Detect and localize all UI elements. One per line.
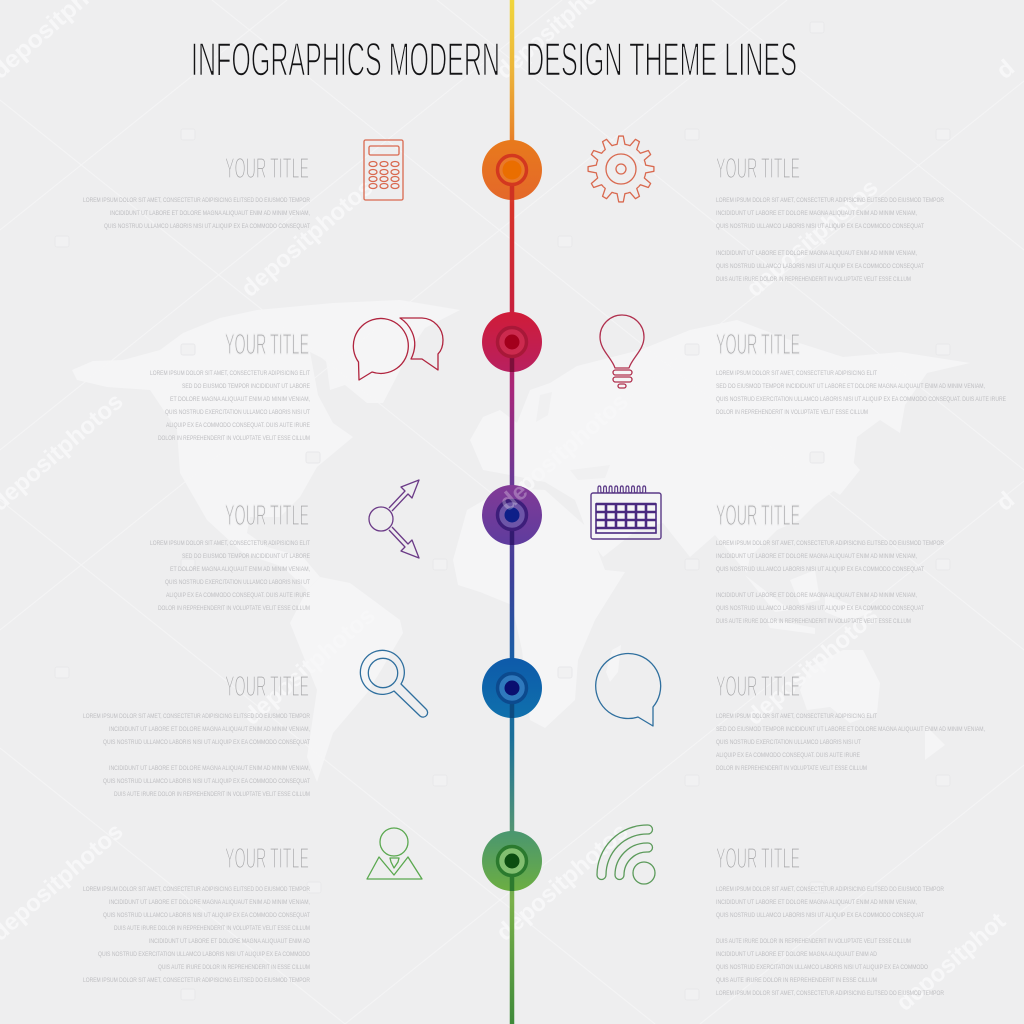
icon: calculator bbox=[364, 140, 403, 200]
body text bbox=[83, 886, 310, 984]
body text: INCIDIDUNT UT LABORE ET DOLORE MAGNA ALIQUAUT ENIM AD MINIM VENIAM, bbox=[110, 210, 310, 217]
panel: right block 4 bbox=[716, 671, 985, 772]
body text bbox=[150, 540, 310, 612]
body text: LOREM IPSUM DOLOR SIT AMET, CONSECTETUR ADIPISICING ELITSED DO EIUSMOD TEMPOR bbox=[716, 197, 944, 204]
body text: ALIQUIP EX EA COMMODO CONSEQUAT. DUIS AUTE IRURE bbox=[166, 422, 310, 429]
body text: DUIS AUTE IRURE DOLOR IN REPREHENDERIT IN VOLUPTATE VELIT ESSE CILLUM bbox=[114, 791, 310, 798]
body text bbox=[716, 886, 944, 997]
node 3 purple bbox=[482, 478, 542, 545]
body text: DOLOR IN REPREHENDERIT IN VOLUPTATE VELIT ESSE CILLUM bbox=[158, 605, 310, 612]
icon: calendar bbox=[591, 486, 661, 539]
panel: right block 3 bbox=[716, 500, 944, 625]
body text: QUIS NOSTRUD ULLAMCO LABORIS NISI UT ALIQUIP EX EA COMMODO CONSEQUAT bbox=[716, 605, 924, 612]
panel: right block 1: YOUR TITLE bbox=[716, 153, 800, 185]
map inland details bbox=[536, 392, 610, 480]
title: INFOGRAPHICS MODERN bbox=[191, 32, 500, 86]
panel: right block 2: YOUR TITLE bbox=[716, 329, 800, 361]
world map bbox=[72, 300, 970, 782]
icon: light bulb bbox=[600, 315, 644, 388]
title: DESIGN THEME LINES bbox=[526, 32, 797, 86]
body text: QUIS NOSTRUD ULLAMCO LABORIS NISI UT ALIQUIP EX EA COMMODO CONSEQUAT bbox=[103, 912, 310, 919]
body text: INCIDIDUNT UT LABORE ET DOLORE MAGNA ALIQUAUT ENIM AD bbox=[149, 938, 310, 945]
body text: DOLOR IN REPREHENDERIT IN VOLUPTATE VELIT ESSE CILLUM bbox=[716, 765, 867, 772]
watermark text: depositphotos bbox=[741, 174, 883, 303]
panel: right block 5 bbox=[716, 843, 944, 997]
icon: rss signal bbox=[597, 825, 655, 884]
icon: person bbox=[367, 828, 422, 879]
icon: speech bubble bbox=[596, 654, 661, 726]
node 1 orange bbox=[482, 140, 542, 200]
body text: QUIS NOSTRUD ULLAMCO LABORIS NISI UT ALIQUIP EX EA COMMODO CONSEQUAT bbox=[103, 778, 310, 785]
panel: left block 4 bbox=[83, 671, 310, 798]
body text bbox=[150, 370, 310, 442]
node 3 purple: de bbox=[494, 478, 533, 517]
body text: INCIDIDUNT UT LABORE ET DOLORE MAGNA ALIQUAUT ENIM AD MINIM VENIAM, bbox=[716, 210, 917, 217]
body text: LOREM IPSUM DOLOR SIT AMET, CONSECTETUR ADIPISICING ELIT bbox=[716, 713, 877, 720]
body text: INCIDIDUNT UT LABORE ET DOLORE MAGNA ALIQUAUT ENIM AD bbox=[716, 951, 877, 958]
body text: ALIQUIP EX EA COMMODO CONSEQUAT. DUIS AUTE IRURE bbox=[716, 752, 860, 759]
watermark text: depositphotos bbox=[238, 602, 380, 731]
watermark text: depositphotos bbox=[491, 818, 633, 947]
body text: DOLOR IN REPREHENDERIT IN VOLUPTATE VELIT ESSE CILLUM bbox=[716, 409, 868, 416]
body text: DUIS AUTE IRURE DOLOR IN REPREHENDERIT IN VOLUPTATE VELIT ESSE CILLUM bbox=[716, 618, 911, 625]
body text: QUIS AUTE IRURE DOLOR IN REPREHENDERIT IN ESSE CILLUM bbox=[158, 964, 310, 971]
body text: ET DOLORE MAGNA ALIQUAUT ENIM AD MINIM VENIAM, bbox=[170, 396, 310, 403]
body text: LOREM IPSUM DOLOR SIT AMET, CONSECTETUR ADIPISICING ELITSED DO EIUSMOD TEMPOR bbox=[716, 886, 944, 893]
panel: left block 3: YOUR TITLE bbox=[225, 500, 309, 532]
panel: right block 1 bbox=[716, 153, 944, 283]
body text: QUIS NOSTRUD EXERCITATION ULLAMCO LABORIS NISI UT bbox=[716, 739, 861, 746]
panel: left block 2: YOUR TITLE bbox=[225, 329, 309, 361]
body text: INCIDIDUNT UT LABORE ET DOLORE MAGNA ALIQUAUT ENIM AD MINIM VENIAM, bbox=[716, 250, 917, 257]
body text: LOREM IPSUM DOLOR SIT AMET, CONSECTETUR ADIPISICING ELITSED DO EIUSMOD TEMPOR bbox=[83, 886, 310, 893]
panel: left block 5: YOUR TITLE bbox=[225, 843, 309, 875]
body text: INCIDIDUNT UT LABORE ET DOLORE MAGNA ALIQUAUT ENIM AD MINIM VENIAM, bbox=[716, 899, 917, 906]
body text: LOREM IPSUM DOLOR SIT AMET, CONSECTETUR ADIPISICING ELITSED DO EIUSMOD TEMPOR bbox=[83, 197, 310, 204]
watermark text: depositphotos bbox=[741, 602, 883, 731]
node 2 red bbox=[482, 312, 542, 372]
body text: LOREM IPSUM DOLOR SIT AMET, CONSECTETUR ADIPISICING ELITSED DO EIUSMOD TEMPOR bbox=[83, 977, 310, 984]
body text: LOREM IPSUM DOLOR SIT AMET, CONSECTETUR ADIPISICING ELITSED DO EIUSMOD TEMPOR bbox=[716, 990, 944, 997]
body text: INCIDIDUNT UT LABORE ET DOLORE MAGNA ALIQUAUT ENIM AD MINIM VENIAM, bbox=[109, 726, 310, 733]
watermark text: depositphotos bbox=[236, 174, 378, 303]
body text: QUIS NOSTRUD EXERCITATION ULLAMCO LABORIS NISI UT ALIQUIP EX EA COMMODO bbox=[716, 964, 928, 971]
body text: LOREM IPSUM DOLOR SIT AMET, CONSECTETUR ADIPISICING ELITSED DO EIUSMOD TEMPOR bbox=[83, 713, 310, 720]
panel: right block 4: YOUR TITLE bbox=[716, 671, 800, 703]
icon: share arrows bbox=[369, 480, 419, 558]
body text bbox=[716, 370, 1006, 416]
body text: ET DOLORE MAGNA ALIQUAUT ENIM AD MINIM VENIAM, bbox=[170, 566, 310, 573]
body text: INCIDIDUNT UT LABORE ET DOLORE MAGNA ALIQUAUT ENIM AD MINIM VENIAM, bbox=[109, 899, 310, 906]
watermark text: depositphot bbox=[891, 908, 1011, 1017]
body text: QUIS NOSTRUD ULLAMCO LABORIS NISI UT ALIQUIP EX EA COMMODO CONSEQUAT bbox=[716, 263, 924, 270]
body text: QUIS NOSTRUD ULLAMCO LABORIS NISI UT ALIQUIP EX EA COMMODO CONSEQUAT bbox=[716, 912, 924, 919]
body text: QUIS NOSTRUD EXERCITATION ULLAMCO LABORIS NISI UT ALIQUIP EX EA COMMODO bbox=[98, 951, 310, 958]
timeline vertical line bbox=[510, 0, 514, 1024]
body text: INCIDIDUNT UT LABORE ET DOLORE MAGNA ALIQUAUT ENIM AD MINIM VENIAM, bbox=[109, 765, 310, 772]
body text bbox=[716, 713, 985, 772]
panel: right block 2 bbox=[716, 329, 1006, 416]
panel: left block 1 bbox=[83, 153, 310, 230]
body text bbox=[83, 197, 310, 230]
panel: right block 5: YOUR TITLE bbox=[716, 843, 800, 875]
icon: magnifier bbox=[360, 650, 428, 717]
body text: QUIS AUTE IRURE DOLOR IN REPREHENDERIT IN ESSE CILLUM bbox=[716, 977, 877, 984]
body text: DOLOR IN REPREHENDERIT IN VOLUPTATE VELIT ESSE CILLUM bbox=[158, 435, 310, 442]
body text: LOREM IPSUM DOLOR SIT AMET, CONSECTETUR ADIPISICING ELIT bbox=[716, 370, 877, 377]
watermark text: d bbox=[991, 487, 1020, 517]
panel: left block 1: YOUR TITLE bbox=[225, 153, 309, 185]
body text: QUIS NOSTRUD EXERCITATION ULLAMCO LABORIS NISI UT bbox=[165, 409, 310, 416]
node 4 blue bbox=[482, 658, 542, 718]
body text bbox=[716, 197, 944, 283]
body text: ALIQUIP EX EA COMMODO CONSEQUAT. DUIS AUTE IRURE bbox=[166, 592, 310, 599]
node 5 green bbox=[482, 831, 542, 891]
icon: chat bubbles bbox=[353, 318, 443, 380]
body text: DUIS AUTE IRURE DOLOR IN REPREHENDERIT IN VOLUPTATE VELIT ESSE CILLUM bbox=[716, 938, 911, 945]
body text: QUIS NOSTRUD ULLAMCO LABORIS NISI UT ALIQUIP EX EA COMMODO CONSEQUAT bbox=[716, 566, 924, 573]
body text: QUIS NOSTRUD ULLAMCO LABORIS NISI UT ALIQUIP EX EA COMMODO CONSEQUAT bbox=[716, 223, 924, 230]
body text: SED DO EIUSMOD TEMPOR INCIDIDUNT UT LABORE bbox=[182, 383, 310, 390]
body text: LOREM IPSUM DOLOR SIT AMET, CONSECTETUR ADIPISICING ELITSED DO EIUSMOD TEMPOR bbox=[716, 540, 944, 547]
panel: right block 3: YOUR TITLE bbox=[716, 500, 800, 532]
body text: DUIS AUTE IRURE DOLOR IN REPREHENDERIT IN VOLUPTATE VELIT ESSE CILLUM bbox=[716, 276, 911, 283]
body text: QUIS NOSTRUD ULLAMCO LABORIS NISI UT ALIQUIP EX EA COMMODO CONSEQUAT bbox=[103, 739, 310, 746]
body text: QUIS NOSTRUD ULLAMCO LABORIS NISI UT ALIQUIP EX EA COMMODO CONSEQUAT bbox=[104, 223, 310, 230]
body text: LOREM IPSUM DOLOR SIT AMET, CONSECTETUR ADIPISICING ELIT bbox=[150, 370, 310, 377]
panel: left block 2 bbox=[150, 329, 310, 442]
body text: QUIS NOSTRUD EXERCITATION ULLAMCO LABORIS NISI UT bbox=[165, 579, 310, 586]
body text: DUIS AUTE IRURE DOLOR IN REPREHENDERIT IN VOLUPTATE VELIT ESSE CILLUM bbox=[114, 925, 310, 932]
body text: SED DO EIUSMOD TEMPOR INCIDIDUNT UT LABORE bbox=[182, 553, 310, 560]
icon: gear bbox=[588, 136, 654, 202]
watermark text: depositphotos bbox=[491, 388, 633, 517]
panel: left block 3 bbox=[150, 500, 310, 612]
panel: left block 5 bbox=[83, 843, 310, 984]
body text bbox=[716, 540, 944, 625]
body text: INCIDIDUNT UT LABORE ET DOLORE MAGNA ALIQUAUT ENIM AD MINIM VENIAM, bbox=[716, 553, 917, 560]
body text bbox=[83, 713, 310, 798]
panel: left block 4: YOUR TITLE bbox=[225, 671, 309, 703]
body text: INCIDIDUNT UT LABORE ET DOLORE MAGNA ALIQUAUT ENIM AD MINIM VENIAM, bbox=[716, 592, 917, 599]
body text: LOREM IPSUM DOLOR SIT AMET, CONSECTETUR ADIPISICING ELIT bbox=[150, 540, 310, 547]
watermark text: d bbox=[991, 55, 1020, 85]
